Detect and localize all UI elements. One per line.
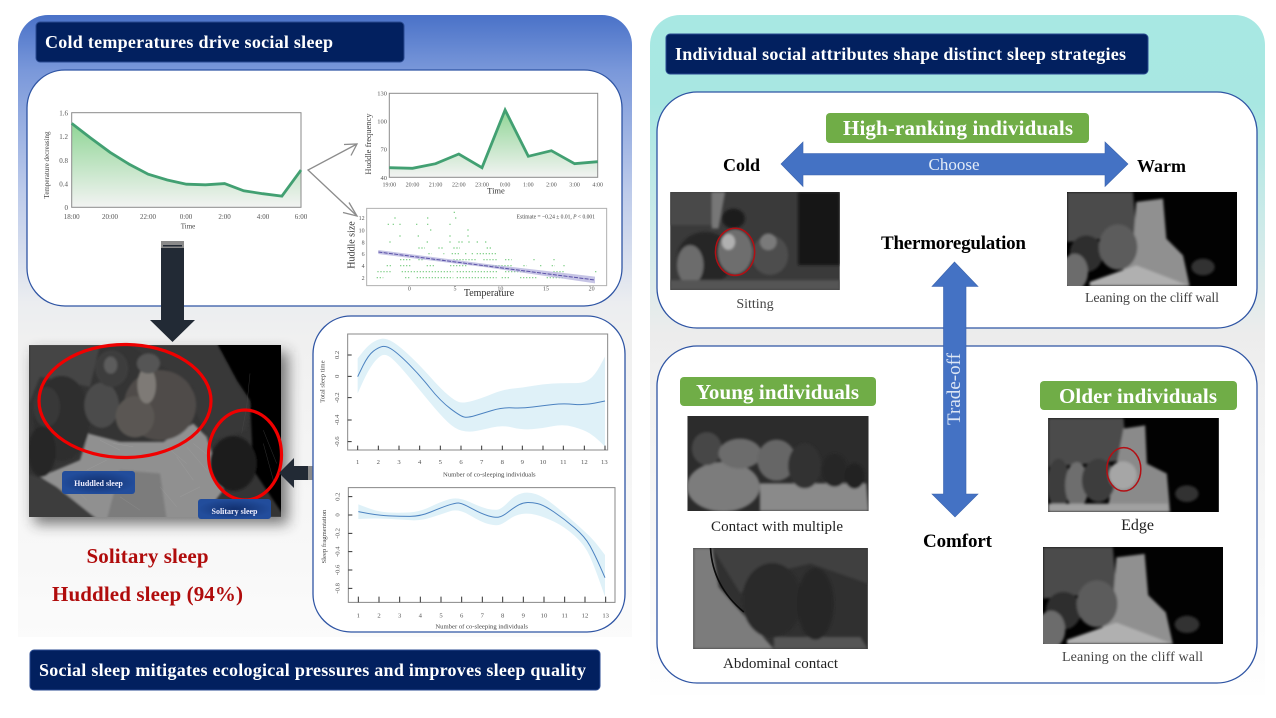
chart: total sleep time: 6 — [459, 459, 463, 466]
arrow: dark down arrow to sleep photo — [150, 241, 195, 342]
label: young individuals — [680, 377, 876, 406]
chart: sleep fragmentation: 2 — [377, 612, 381, 619]
chart: total sleep time: 8 — [501, 459, 505, 466]
text: cold: Cold — [723, 155, 760, 175]
chart: temperature decreasing over time: 18:00 — [64, 213, 80, 221]
chart: total sleep time: 1 — [356, 459, 359, 466]
chart: sleep fragmentation: 1 — [357, 612, 360, 619]
caption: leaning on the cliff wall (older): Leaning on the cliff wall — [1062, 650, 1203, 665]
chart: huddle size vs temperature scatter: Estimate = −0.24 ± 0.01, P < 0.001 — [517, 213, 595, 220]
panel: social attributes background — [650, 15, 1265, 695]
label: older individuals: Older individuals — [1059, 384, 1217, 408]
text: comfort: Comfort — [923, 531, 993, 552]
heading: cold temperatures drive social sleep: Cold temperatures drive social sleep — [45, 32, 333, 52]
chart: total sleep time: 12 — [581, 459, 588, 466]
chart: sleep fragmentation: Sleep fragmentation — [321, 509, 328, 564]
chart: total sleep time: 4 — [418, 459, 422, 466]
chart: temperature decreasing over time — [43, 110, 308, 230]
chart: sleep fragmentation: 11 — [561, 612, 568, 619]
chart: huddle frequency: 130 — [377, 90, 387, 98]
chart: sleep fragmentation — [321, 488, 615, 631]
chart: sleep fragmentation: -0.8 — [335, 582, 342, 594]
chart: huddle size vs temperature scatter: 20 — [589, 287, 595, 293]
chart: huddle frequency: Huddle frequency — [363, 113, 373, 175]
panel: cold temperatures background — [18, 15, 632, 637]
chart: total sleep time — [320, 334, 608, 478]
text: thermoregulation: Thermoregulation — [881, 233, 1026, 254]
label: older individuals — [1040, 381, 1237, 410]
chart: huddle frequency: 40 — [380, 175, 387, 182]
chart: total sleep time: -0.4 — [334, 414, 341, 425]
caption: sitting: Sitting — [736, 297, 774, 312]
chart: total sleep time: Total sleep time — [320, 360, 327, 403]
chart: huddle size vs temperature scatter: 0 — [408, 287, 411, 293]
chart: total sleep time: 0 — [334, 374, 341, 378]
chart: temperature decreasing over time: 4:00 — [257, 213, 270, 221]
chart: huddle frequency: 0:00 — [500, 182, 510, 188]
panel: sleep photo with huddled and solitary groups — [27, 340, 288, 524]
heading: cold temperatures drive social sleep — [36, 22, 404, 62]
chart: total sleep time: 0.2 — [334, 351, 341, 359]
chart: sleep fragmentation: 6 — [460, 612, 464, 619]
photo: edge position — [1048, 418, 1219, 512]
chart: total sleep time: -0.2 — [334, 392, 341, 403]
arrows: temperature chart to huddle charts — [308, 144, 357, 216]
chart: total sleep time: 9 — [521, 459, 525, 466]
chart: sleep fragmentation: 0.2 — [335, 493, 342, 501]
panel: young and older individuals — [657, 346, 1257, 683]
caption: contact with multiple: Contact with multiple — [711, 519, 843, 535]
chart: huddle size vs temperature scatter: 2 — [362, 276, 365, 282]
chart: sleep fragmentation: -0.4 — [335, 546, 342, 557]
chart: temperature decreasing over time: 22:00 — [140, 213, 156, 221]
photo: leaning on the cliff wall (older) — [1043, 547, 1223, 644]
chart: sleep fragmentation: 13 — [602, 612, 610, 619]
chart: temperature decreasing over time: 2:00 — [218, 213, 231, 221]
chart: sleep fragmentation: 4 — [419, 612, 423, 619]
chart: huddle size vs temperature scatter: Temperature — [464, 288, 515, 299]
label: high-ranking individuals — [826, 113, 1089, 143]
chart: huddle frequency: 4:00 — [592, 182, 603, 188]
chart: huddle size vs temperature scatter: Huddle size — [346, 221, 357, 269]
chart: total sleep time: 2 — [377, 459, 380, 466]
chart: huddle frequency: Time — [487, 186, 505, 196]
caption: edge: Edge — [1121, 517, 1154, 534]
chart: huddle frequency: 22:00 — [452, 182, 466, 188]
chart: sleep fragmentation: 7 — [481, 612, 485, 619]
chart: total sleep time: 11 — [560, 459, 567, 466]
chart: sleep fragmentation: -0.2 — [335, 528, 342, 539]
label: huddled sleep: Huddled sleep — [74, 479, 123, 488]
chart: sleep fragmentation: Number of co-sleeping individuals — [435, 624, 528, 631]
chart: huddle frequency: 3:00 — [569, 182, 580, 188]
text: warm: Warm — [1137, 156, 1186, 176]
chart: temperature decreasing over time: 0 — [64, 204, 68, 212]
chart: huddle size vs temperature scatter: 15 — [543, 287, 549, 293]
chart: sleep fragmentation: 9 — [522, 612, 526, 619]
label: high-ranking individuals: High-ranking individuals — [843, 116, 1073, 140]
chart: temperature decreasing over time: 1.2 — [59, 133, 68, 141]
chart: sleep fragmentation: 5 — [439, 612, 443, 619]
chart: total sleep time: 13 — [601, 459, 608, 466]
chart: temperature decreasing over time: Temperature decreasing — [43, 131, 51, 198]
chart: sleep fragmentation: 8 — [501, 612, 505, 619]
label: solitary sleep: Solitary sleep — [212, 507, 258, 516]
chart: huddle size vs temperature scatter: 8 — [362, 240, 365, 246]
photo: abdominal contact — [693, 548, 868, 649]
chart: huddle frequency: 1:00 — [523, 182, 534, 188]
panel: co-sleeping charts — [313, 316, 625, 632]
photo: leaning on the cliff wall (warm) — [1067, 192, 1237, 286]
chart: huddle size vs temperature scatter: 10 — [497, 287, 503, 293]
highlight: huddled group ellipse — [39, 344, 211, 458]
arrow: choose double arrow — [781, 142, 1128, 186]
heading: individual social attributes: Individual social attributes shape distinct sleep strategies — [675, 44, 1126, 64]
chart: huddle size vs temperature scatter: 6 — [362, 252, 365, 258]
chart: sleep fragmentation: 3 — [398, 612, 402, 619]
chart: temperature decreasing over time: 0.8 — [59, 157, 68, 165]
panel: temperature and huddling charts — [27, 70, 622, 306]
chart: temperature decreasing over time: 20:00 — [102, 213, 118, 221]
chart: huddle size vs temperature scatter: 4 — [362, 264, 365, 270]
label: solitary sleep — [198, 499, 271, 519]
arrow: trade-off vertical double arrow — [932, 262, 978, 517]
chart: total sleep time: Number of co-sleeping individuals — [443, 471, 536, 478]
caption: leaning on the cliff wall: Leaning on the cliff wall — [1085, 291, 1219, 306]
chart: total sleep time: 10 — [540, 459, 547, 466]
chart: huddle frequency: 70 — [380, 146, 387, 154]
heading: social sleep mitigates ecological pressures: Social sleep mitigates ecological pressures and improves sleep quality — [39, 660, 586, 680]
chart: huddle size vs temperature scatter — [346, 208, 607, 299]
chart: temperature decreasing over time: 6:00 — [295, 213, 308, 221]
chart: huddle frequency: 23:00 — [475, 182, 489, 188]
label: young individuals: Young individuals — [696, 380, 859, 404]
label: huddled sleep — [62, 471, 135, 494]
chart: sleep fragmentation: 0 — [335, 513, 342, 517]
chart: temperature decreasing over time: 1.6 — [59, 110, 68, 118]
chart: total sleep time: 7 — [480, 459, 484, 466]
text: solitary sleep: Solitary sleep — [86, 544, 208, 568]
chart: huddle size vs temperature scatter: 10 — [359, 228, 365, 234]
chart: sleep fragmentation: -0.6 — [335, 564, 342, 575]
text: huddled sleep 94%: Huddled sleep (94%) — [52, 582, 243, 606]
chart: temperature decreasing over time: Time — [181, 222, 195, 230]
chart: total sleep time: 3 — [397, 459, 401, 466]
chart: huddle frequency: 20:00 — [406, 182, 419, 188]
arrow: trade-off vertical double arrow: Trade-off — [944, 352, 965, 425]
panel: high-ranking individuals — [657, 92, 1257, 328]
heading: individual social attributes — [666, 34, 1148, 74]
chart: sleep fragmentation: 12 — [582, 612, 588, 619]
chart: total sleep time: 5 — [439, 459, 443, 466]
chart: huddle frequency: 21:00 — [429, 182, 442, 188]
chart: huddle size vs temperature scatter: 5 — [453, 287, 456, 293]
heading: social sleep mitigates ecological pressures — [30, 650, 600, 690]
chart: huddle frequency — [363, 90, 603, 196]
photo: huddled and solitary monkeys — [29, 345, 281, 517]
chart: temperature decreasing over time: 0.4 — [59, 180, 68, 188]
chart: sleep fragmentation: 10 — [541, 612, 548, 619]
highlight: solitary monkey ellipse — [208, 410, 282, 500]
chart: huddle frequency: 2:00 — [546, 182, 557, 188]
chart: huddle size vs temperature scatter: 12 — [359, 216, 365, 222]
chart: total sleep time: -0.6 — [334, 436, 341, 447]
chart: huddle frequency: 19:00 — [382, 182, 396, 188]
caption: abdominal contact: Abdominal contact — [723, 656, 839, 672]
photo: contact with multiple — [687, 416, 869, 511]
chart: temperature decreasing over time: 0:00 — [180, 213, 193, 221]
photo: sitting monkey — [670, 192, 840, 290]
chart: huddle frequency: 100 — [377, 118, 387, 126]
arrow: dark left arrow from sleep charts — [279, 458, 313, 488]
arrow: choose double arrow: Choose — [928, 155, 980, 174]
